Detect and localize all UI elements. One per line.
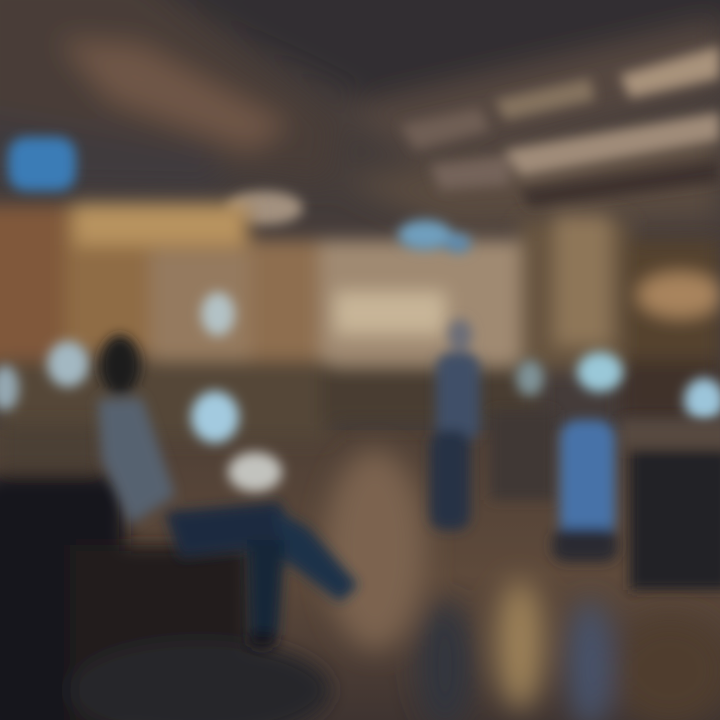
- standing person in blue: [430, 319, 480, 530]
- glowing blue screens: [0, 137, 720, 492]
- shoe: [247, 631, 277, 649]
- standing figure with blue reflection: [552, 420, 618, 562]
- thigh: [165, 502, 296, 558]
- right counter: [490, 410, 720, 590]
- floor reflections: [325, 450, 720, 720]
- head: [100, 335, 140, 395]
- torso: [98, 398, 175, 525]
- ceiling: [0, 0, 720, 230]
- back wall: warm wood panels: [0, 203, 720, 440]
- ceiling light beams: [227, 46, 720, 225]
- lower leg: [247, 540, 285, 635]
- seated person: [98, 335, 358, 649]
- leg: [272, 508, 358, 602]
- dark armchair: [0, 425, 330, 720]
